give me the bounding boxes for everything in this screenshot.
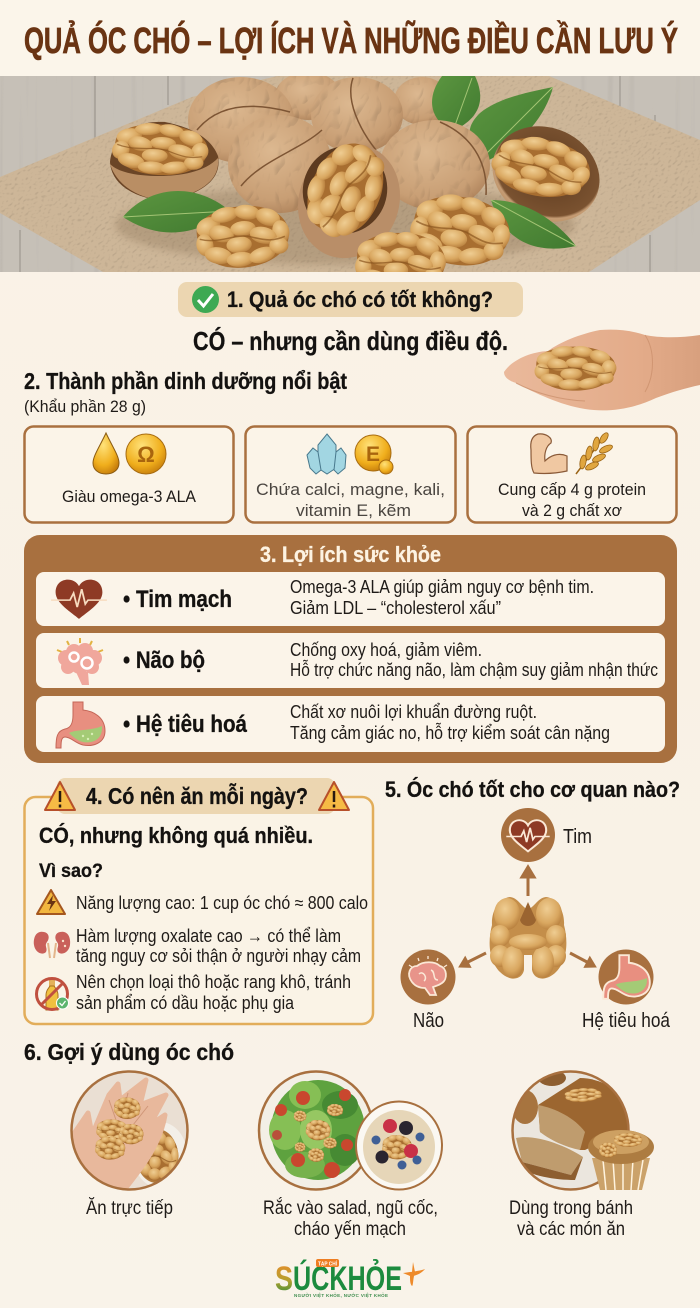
card text: [256, 481, 445, 520]
reason 3: sản phẩm có dầu hoặc phụ gia: [76, 993, 295, 1013]
caption: Ăn trực tiếp: [86, 1198, 173, 1219]
right half: [492, 126, 600, 222]
lower leaves: [123, 191, 230, 232]
icon: omega coin: Ω: [137, 442, 155, 467]
reason 1: Năng lượng cao: 1 cup óc chó ≈ 800 calo: [76, 893, 368, 913]
icon: wheat: [576, 431, 614, 474]
logo: Sức Khỏe: ÚCKHỎE: [293, 1260, 402, 1298]
title band: [0, 0, 700, 76]
panel heading: 3. Lợi ích sức khỏe: [260, 542, 441, 567]
icon: heart badge: [501, 808, 555, 862]
caption: và các món ăn: [517, 1219, 625, 1240]
label: digestion: Hệ tiêu hoá: [582, 1010, 671, 1032]
label: brain: Não: [413, 1010, 444, 1032]
description: Omega-3 ALA giúp giảm nguy cơ bệnh tim.: [290, 577, 594, 597]
reason 3: [76, 972, 351, 1013]
icon: crystals: [307, 434, 346, 474]
suggestion: eat directly: [70, 1070, 190, 1219]
section 1 pill heading: [178, 282, 523, 317]
section 1 heading text: 1. Quả óc chó có tốt không?: [227, 287, 493, 312]
answer: CÓ, nhưng không quá nhiều.: [39, 823, 313, 848]
icon: energy warning: [37, 890, 65, 914]
heading pill: 4. Có nên ăn mỗi ngày?: [86, 782, 308, 809]
icon: warning right: [319, 782, 349, 810]
row: digestion: [36, 696, 665, 752]
icon: vitamin E: [355, 435, 393, 474]
logo: Sức Khỏe: NGƯỜI VIỆT KHỎE, NƯỚC VIỆT KHỎE: [294, 1291, 388, 1298]
loose kernels: [196, 204, 290, 268]
card text: Cung cấp 4 g protein: [498, 480, 646, 499]
section 2 heading: 2. Thành phần dinh dưỡng nổi bật: [24, 368, 347, 394]
why heading: Vì sao?: [39, 861, 103, 882]
left half: [110, 122, 219, 200]
arrow up: [522, 867, 534, 896]
label: heart: Tim: [563, 826, 592, 848]
description: [290, 640, 658, 680]
label: • Não bộ: [123, 647, 205, 674]
icon: stomach: [56, 702, 105, 748]
icon: stomach badge: [598, 950, 654, 1004]
photo: salad plate: [259, 1072, 442, 1190]
logo: Sức Khỏe: S: [275, 1260, 293, 1298]
diagram: walnut to organs: [400, 808, 671, 1032]
section 6 heading: 6. Gợi ý dùng óc chó: [24, 1039, 234, 1065]
icon: oil drop: [93, 433, 119, 474]
centre half: [298, 149, 400, 258]
icon: brain: [57, 638, 103, 685]
photo: hand with walnuts: [70, 1070, 190, 1192]
card text: và 2 g chất xơ: [522, 501, 622, 520]
row: heart: [36, 572, 665, 626]
card text: Giàu omega-3 ALA: [62, 487, 197, 506]
description: [290, 577, 594, 618]
description: Tăng cảm giác no, hỗ trợ kiểm soát cân nặng: [290, 722, 610, 743]
reason 2: [76, 926, 361, 966]
card: minerals: [246, 426, 456, 522]
photo: banana bread and muffin: [510, 1070, 654, 1192]
suggestion: salad and oats: [259, 1072, 442, 1240]
card text: Chứa calci, magne, kali,: [256, 481, 445, 499]
label: • Tim mạch: [123, 586, 232, 613]
description: Chất xơ nuôi lợi khuẩn đường ruột.: [290, 702, 537, 722]
icon: muffin: [588, 1130, 654, 1190]
icon: warning left: [45, 782, 75, 810]
row: brain: [36, 633, 665, 688]
panel: eat daily: [24, 778, 373, 1024]
caption: [509, 1198, 633, 1240]
reason 2: Hàm lượng oxalate cao → có thể làm: [76, 926, 341, 946]
card: omega-3: [24, 426, 234, 522]
reason 2: tăng nguy cơ sỏi thận ở người nhạy cảm: [76, 946, 361, 966]
icon: green check: [192, 286, 219, 313]
description: [290, 702, 610, 743]
card text: vitamin E, kẽm: [296, 502, 411, 520]
caption: [263, 1197, 438, 1240]
card: protein and fibre: [468, 426, 676, 522]
caption: cháo yến mạch: [294, 1219, 406, 1240]
label: • Hệ tiêu hoá: [123, 711, 248, 738]
arrow to digestion: [570, 953, 596, 967]
illustration: hand holding walnuts: [504, 330, 700, 410]
logo: Sức Khỏe: TẠP CHÍ: [318, 1260, 337, 1268]
caption: Rắc vào salad, ngũ cốc,: [263, 1197, 438, 1219]
heading pill: [57, 778, 335, 814]
suggestion: baking: [509, 1070, 654, 1240]
answer text: CÓ – nhưng cần dùng điều độ.: [193, 326, 508, 356]
icon: no added oil: [36, 978, 68, 1010]
hero photo: walnuts on burlap: [0, 76, 700, 272]
reason 3: Nên chọn loại thô hoặc rang khô, tránh: [76, 972, 351, 992]
icon: heart: [51, 580, 107, 619]
icon: brain badge: [400, 950, 456, 1004]
description: Chống oxy hoá, giảm viêm.: [290, 640, 482, 660]
icon: kidneys: [34, 932, 70, 958]
icon: flexed arm: [531, 434, 567, 473]
photo: oat bowl: [356, 1102, 442, 1190]
icon: walnut kernel: [490, 897, 566, 979]
arrow to brain: [459, 953, 486, 967]
card text: [498, 480, 646, 520]
caption: Dùng trong bánh: [509, 1198, 633, 1219]
icon: vitamin E: E: [366, 443, 380, 466]
description: Giảm LDL – “cholesterol xấu”: [290, 598, 501, 618]
icon: omega coin: [126, 434, 166, 474]
serving note: (Khẩu phần 28 g): [24, 397, 146, 416]
panel: health benefits: [24, 535, 677, 763]
